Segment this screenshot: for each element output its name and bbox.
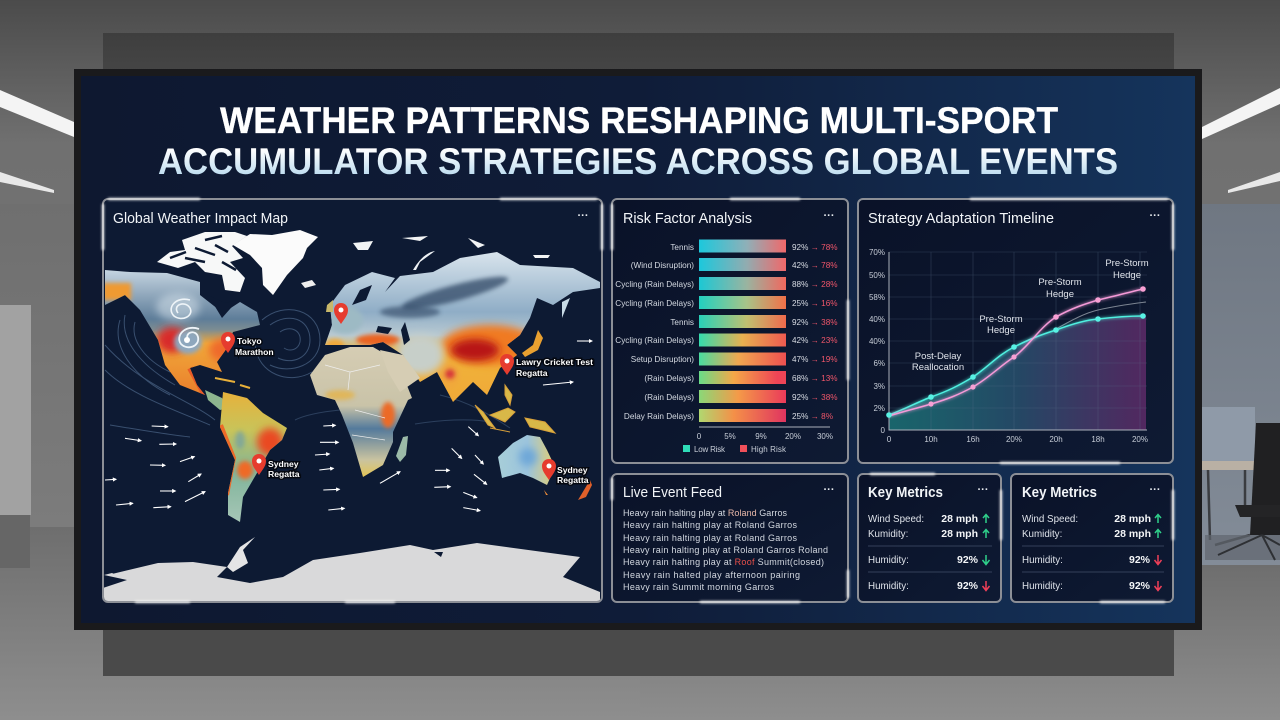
feed lines: Heavy rain halting play at Roland Garros Roland	[623, 545, 828, 555]
metric rows: 92%	[1129, 580, 1151, 592]
risk row labels: Tennis	[670, 243, 694, 252]
panel: live event feed	[612, 474, 848, 602]
risk row values: 92% → 78%	[792, 243, 838, 252]
timeline annotations	[912, 258, 1149, 373]
timeline annotations: Post-Delay	[915, 351, 961, 362]
risk bars	[699, 240, 786, 422]
timeline x axis labels: 18h	[1091, 435, 1105, 444]
timeline x axis labels: 10h	[924, 435, 938, 444]
timeline heading: Strategy Adaptation Timeline	[868, 210, 1054, 227]
metric rows: Wind Speed:	[868, 514, 924, 525]
risk row labels: Tennis	[670, 318, 694, 327]
risk axis: 0	[697, 432, 702, 441]
risk axis: 30%	[817, 432, 833, 441]
panel: key metrics right	[1011, 474, 1173, 602]
metric rows	[1022, 513, 1164, 592]
metrics heading: Key Metrics	[868, 484, 943, 501]
risk row values: 68% → 13%	[792, 374, 838, 383]
map pin: Tokyo Marathon	[221, 332, 274, 357]
wind arrows	[105, 339, 593, 512]
map pin: Lawry Cricket Test Regatta	[500, 354, 593, 378]
world map	[104, 230, 600, 601]
timeline y axis labels: 6%	[873, 359, 885, 368]
Greenland	[233, 230, 318, 295]
timeline annotations: Pre-Storm	[979, 314, 1023, 325]
South America	[220, 392, 287, 522]
Arctic islands	[157, 232, 247, 292]
timeline y axis labels	[869, 248, 886, 435]
metric rows: 28 mph	[941, 528, 978, 540]
metric rows: 92%	[1129, 554, 1151, 566]
risk row values	[792, 243, 838, 421]
timeline y axis labels: 2%	[873, 404, 885, 413]
timeline annotations: Reallocation	[912, 362, 964, 373]
map pin: Tokyo Marathon: Tokyo	[237, 336, 262, 346]
risk row values: 25% → 8%	[792, 412, 833, 421]
Britain and Scandinavia	[326, 300, 333, 312]
map pin: Sydney Regatta Australia: Sydney	[557, 465, 588, 475]
feed lines: Heavy rain halted play afternoon pairing	[623, 570, 800, 580]
panel: strategy adaptation timeline	[858, 199, 1173, 463]
timeline annotations: Pre-Storm	[1038, 277, 1082, 288]
feed lines: Heavy rain halting play at Roland Garros	[623, 520, 798, 530]
risk row labels: (Wind Disruption)	[631, 261, 694, 270]
map pin: Sydney Regatta Australia	[542, 459, 589, 485]
risk legend: High Risk	[751, 445, 787, 454]
map pin: Lawry Cricket Test Regatta: Lawry Cricket Test	[516, 357, 593, 367]
feed menu: ···	[824, 484, 834, 496]
timeline x axis labels: 0	[887, 435, 892, 444]
risk row labels: Delay Rain Delays)	[624, 412, 694, 421]
risk row values: 42% → 23%	[792, 336, 838, 345]
metric rows: Kumidity:	[868, 529, 908, 540]
risk axis	[697, 427, 833, 441]
timeline annotations: Hedge	[987, 325, 1015, 336]
risk row values: 47% → 19%	[792, 355, 838, 364]
wind currents	[105, 310, 510, 437]
map pin: Sydney Regatta South America: Regatta	[268, 469, 300, 479]
timeline annotations: Pre-Storm	[1105, 258, 1149, 269]
risk row values: 92% → 38%	[792, 393, 838, 402]
risk legend: Low Risk	[694, 445, 726, 454]
map pin: Tokyo Marathon: Marathon	[235, 347, 274, 357]
risk row values: 42% → 78%	[792, 261, 838, 270]
risk row labels: Cycling (Rain Delays)	[615, 280, 694, 289]
feed lines: Heavy rain halting play at Roland Garros	[623, 508, 788, 518]
risk row values: 88% → 28%	[792, 280, 838, 289]
timeline x axis labels: 20h	[1049, 435, 1063, 444]
timeline y axis labels: 40%	[869, 337, 885, 346]
map pin: Sydney Regatta South America	[252, 454, 300, 479]
timeline y axis labels: 3%	[873, 382, 885, 391]
feed lines: Heavy rain halting play at Roof Summit(closed)	[623, 557, 824, 567]
risk row values: 25% → 16%	[792, 299, 838, 308]
timeline annotations: Hedge	[1046, 289, 1074, 300]
Caribbean and Central America	[205, 390, 222, 410]
timeline y axis labels: 40%	[869, 315, 885, 324]
timeline menu: ···	[1150, 210, 1160, 222]
metric rows: Humidity:	[1022, 581, 1063, 592]
metric rows: 92%	[957, 580, 979, 592]
metric rows: 28 mph	[941, 513, 978, 525]
panel: key metrics left	[858, 474, 1001, 602]
metric rows: 28 mph	[1114, 528, 1151, 540]
metric rows: Humidity:	[868, 555, 909, 566]
Africa	[310, 347, 412, 477]
Australia	[498, 435, 552, 485]
Eurasia	[325, 250, 605, 405]
risk legend	[683, 445, 787, 454]
feed heading: Live Event Feed	[623, 484, 722, 501]
panel: global weather impact map	[102, 198, 603, 603]
timeline y axis labels: 70%	[869, 248, 885, 257]
metric rows: Wind Speed:	[1022, 514, 1078, 525]
metric rows: Kumidity:	[1022, 529, 1062, 540]
timeline y axis labels: 58%	[869, 293, 885, 302]
risk axis: 9%	[755, 432, 767, 441]
timeline x axis labels: 20%	[1132, 435, 1148, 444]
map pin: Sydney Regatta Australia: Regatta	[557, 475, 589, 485]
risk axis: 20%	[785, 432, 801, 441]
metric rows: Humidity:	[1022, 555, 1063, 566]
inland seas and Arabia	[376, 322, 410, 345]
metrics menu: ···	[1150, 484, 1160, 496]
arctic Russia islands	[353, 236, 550, 258]
feed lines	[623, 508, 828, 592]
timeline x axis labels: 20%	[1006, 435, 1022, 444]
metric rows: Humidity:	[868, 581, 909, 592]
map heading: Global Weather Impact Map	[113, 210, 288, 227]
risk row labels	[615, 243, 694, 421]
Japan and islands	[522, 330, 543, 357]
metric rows	[868, 513, 992, 592]
map pin: Sydney Regatta South America: Sydney	[268, 459, 299, 469]
risk row labels: Cycling (Rain Delays)	[615, 336, 694, 345]
risk row labels: Setup Disruption)	[631, 355, 694, 364]
risk row labels: (Rain Delays)	[644, 393, 694, 402]
metrics heading: Key Metrics	[1022, 484, 1097, 501]
title: WEATHER PATTERNS RESHAPING MULTI-SPORT	[220, 100, 1058, 141]
risk row values: 92% → 38%	[792, 318, 838, 327]
display screen	[74, 69, 1202, 630]
map menu: ···	[578, 210, 588, 222]
feed lines: Heavy rain Summit morning Garros	[623, 582, 774, 592]
timeline x axis labels: 16h	[966, 435, 980, 444]
risk heading: Risk Factor Analysis	[623, 210, 752, 227]
risk menu: ···	[824, 210, 834, 222]
metric rows: 92%	[957, 554, 979, 566]
panel: risk factor analysis	[612, 199, 848, 463]
timeline annotations: Hedge	[1113, 270, 1141, 281]
wall column behind the display	[103, 33, 1174, 676]
storm swirls	[170, 298, 200, 348]
Antarctica	[103, 543, 600, 602]
metric rows: 28 mph	[1114, 513, 1151, 525]
timeline x axis labels	[887, 435, 1148, 444]
risk row labels: (Rain Delays)	[644, 374, 694, 383]
risk row labels: Cycling (Rain Delays)	[615, 299, 694, 308]
title: ACCUMULATOR STRATEGIES ACROSS GLOBAL EVENTS	[158, 141, 1118, 182]
title	[158, 100, 1118, 182]
map pin: Europe	[334, 303, 348, 324]
metrics menu: ···	[978, 484, 988, 496]
line chart	[886, 252, 1147, 430]
feed lines: Heavy rain halting play at Roland Garros	[623, 533, 798, 543]
map pin: Lawry Cricket Test Regatta: Regatta	[516, 368, 548, 378]
North America	[105, 270, 260, 395]
risk axis: 5%	[724, 432, 736, 441]
timeline y axis labels: 50%	[869, 271, 885, 280]
timeline y axis labels: 0	[881, 426, 886, 435]
